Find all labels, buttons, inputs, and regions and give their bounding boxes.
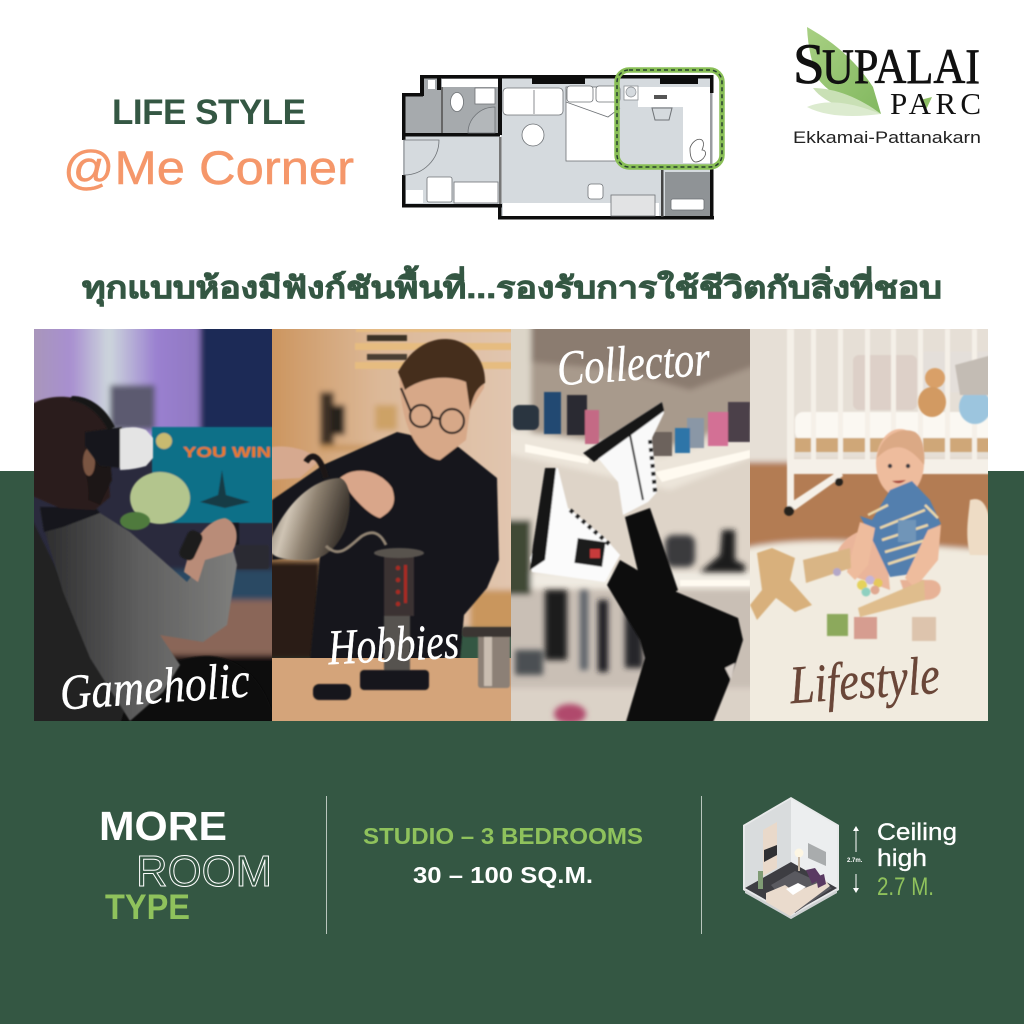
nursery background bbox=[750, 329, 988, 721]
logo: supalai parc: UPALAI bbox=[822, 38, 980, 94]
photo panel: gameholic bbox=[34, 329, 272, 721]
logo: supalai parc: Ekkamai-Pattanakarn bbox=[793, 128, 981, 147]
ceiling high label: high bbox=[877, 845, 927, 872]
man with black shirt bbox=[268, 339, 499, 660]
photo panel: lifestyle bbox=[750, 329, 988, 721]
legs in black jeans bbox=[607, 508, 743, 725]
keyboard and plant bbox=[120, 512, 269, 569]
photo panel: hobbies bbox=[272, 329, 511, 721]
illuminated shelf strips bbox=[525, 444, 750, 586]
title: life style at me corner: LIFE STYLE bbox=[112, 93, 306, 132]
logo: supalai parc bbox=[793, 27, 981, 147]
ceiling high label bbox=[877, 819, 957, 901]
monitor showing you win bbox=[130, 427, 276, 524]
shop background bbox=[511, 329, 750, 721]
unit types and sizes: STUDIO – 3 BEDROOMS bbox=[363, 823, 643, 849]
floor plan with highlighted me corner bbox=[402, 70, 722, 220]
me corner desk and chair bbox=[624, 86, 710, 163]
more room type label bbox=[99, 803, 272, 927]
cafe background and shelves bbox=[272, 329, 511, 658]
caption: collector: Collector bbox=[555, 330, 712, 396]
vr headset bbox=[70, 396, 153, 470]
more room type label: ROOM bbox=[136, 847, 272, 896]
divider right bbox=[701, 796, 702, 934]
green dotted highlight frame bbox=[617, 70, 722, 167]
aeropress coffee maker bbox=[360, 548, 429, 690]
upper white boot bbox=[583, 402, 664, 515]
floor plan: room fills bbox=[403, 77, 712, 218]
more room type label: MORE bbox=[99, 803, 227, 849]
caption: gameholic: Gameholic bbox=[58, 651, 251, 721]
heading: every room type has function space: ทุกแบบห้องมีฟังก์ชันพื้นที่...รองรับการใช้ชีวิตกับสิ่งที่ชอบ bbox=[82, 265, 942, 307]
logo: supalai parc: PARC bbox=[890, 86, 981, 121]
caption: lifestyle: Lifestyle bbox=[787, 645, 942, 715]
title: life style at me corner bbox=[63, 93, 354, 194]
unit types and sizes bbox=[363, 823, 643, 888]
photo panel: collector bbox=[511, 329, 750, 721]
more room type label: TYPE bbox=[105, 888, 190, 927]
title: life style at me corner: @Me Corner bbox=[63, 141, 354, 194]
shelved boots and shoes bbox=[515, 530, 745, 724]
floor plan: furniture bbox=[404, 86, 704, 216]
teddy bear and blue toy bbox=[918, 355, 992, 424]
green lower background bbox=[0, 471, 1024, 1024]
metal cup and ring bbox=[313, 627, 514, 700]
logo wordmark: S bbox=[793, 33, 825, 96]
logo leaves bbox=[807, 27, 932, 116]
table bbox=[272, 658, 511, 721]
caption: hobbies: Hobbies bbox=[326, 613, 460, 675]
handbags on the shelf bbox=[513, 392, 750, 456]
icon: isometric room bbox=[743, 797, 839, 919]
wooden toys bbox=[750, 499, 992, 641]
man in hoodie bbox=[30, 397, 237, 721]
lower white boot bbox=[530, 468, 620, 582]
gooseneck kettle bbox=[268, 457, 386, 560]
arrow: ceiling height bbox=[847, 826, 863, 893]
monitor showing you win: YOU WIN bbox=[183, 444, 271, 461]
gaming chair bbox=[34, 522, 231, 721]
white upper background bbox=[0, 0, 1024, 471]
divider left bbox=[326, 796, 327, 934]
floor plan: walls bbox=[402, 75, 714, 220]
gaming room background bbox=[34, 329, 272, 712]
wooden wall shelves bbox=[355, 329, 516, 369]
baby with striped shirt bbox=[838, 429, 941, 600]
unit types and sizes: 30 – 100 SQ.M. bbox=[413, 862, 593, 888]
ceiling high label: 2.7 M. bbox=[877, 873, 934, 901]
crib with mattress and pillows bbox=[784, 329, 992, 516]
arrow: ceiling height: 2.7m. bbox=[847, 858, 863, 864]
ceiling high label: Ceiling bbox=[877, 819, 957, 846]
